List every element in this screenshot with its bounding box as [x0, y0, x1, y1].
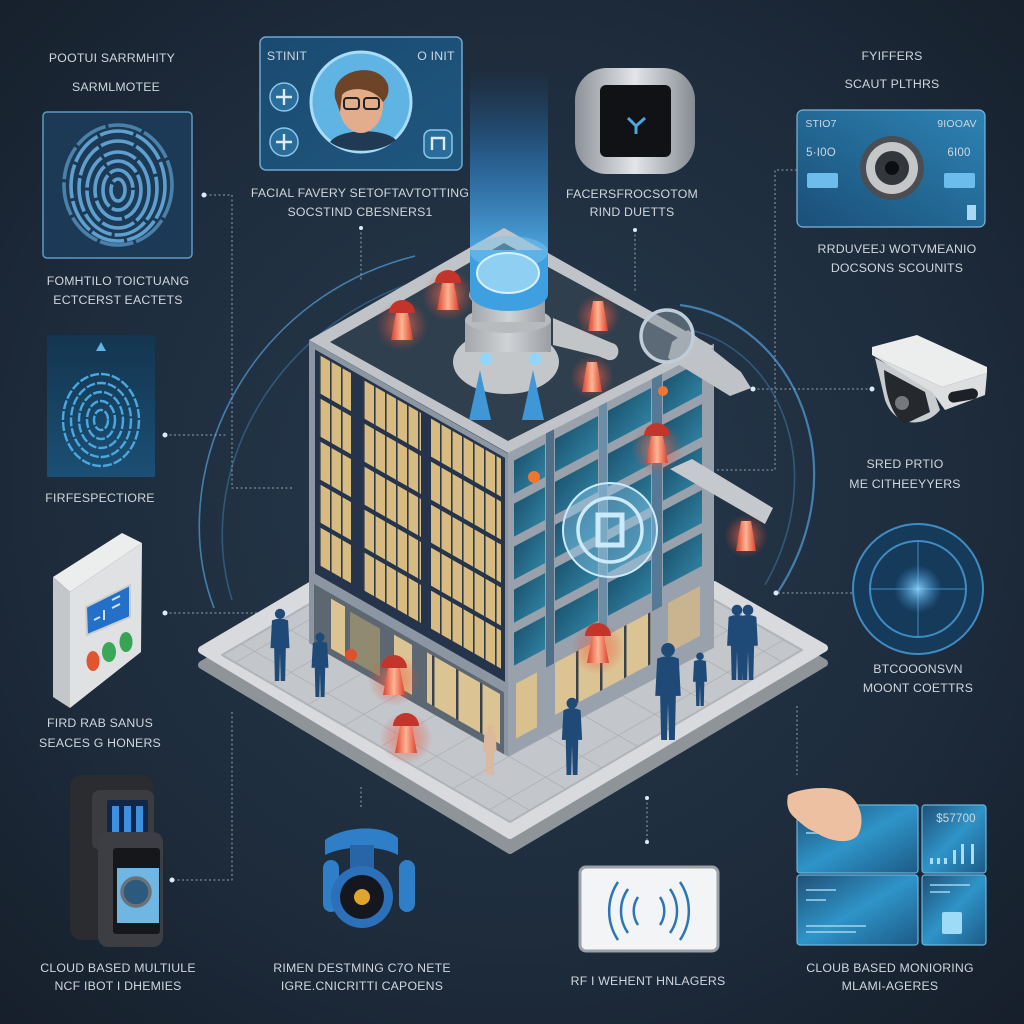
icon: security camera [872, 335, 987, 424]
left facade [309, 340, 508, 757]
caption: remote: IGRE.CNICRITTI CAPOENS [281, 979, 443, 993]
top left heading: POOTUI SARRMHITY [49, 51, 175, 65]
building [309, 228, 714, 757]
arm devices [553, 310, 773, 524]
top left heading: SARMLMOTEE [72, 80, 160, 94]
icon: face [311, 52, 411, 152]
connector lines [162, 170, 874, 882]
icon: glowing fingerprint [63, 374, 139, 466]
caption: cloud monitoring: CLOUB BASED MONIORING [806, 961, 974, 975]
panel: camera dashboard: 9IOOAV [937, 118, 977, 130]
top right heading: FYIFFERS [861, 49, 923, 63]
icon: lens [860, 136, 924, 200]
beam [470, 72, 548, 290]
caption: speed: ME CITHEEYYERS [849, 477, 961, 491]
top right heading: SCAUT PLTHRS [845, 77, 939, 91]
caption: wifi: RF I WEHENT HNLAGERS [571, 974, 725, 988]
caption: cloud based multiple [40, 961, 196, 993]
holographic lock [563, 483, 657, 577]
caption: remote [273, 961, 451, 993]
caption: cloud monitoring [806, 961, 974, 993]
caption: fire inspection: FIRFESPECTIORE [45, 491, 155, 505]
panel: facial recognition: O INIT [417, 49, 455, 63]
caption: cloud based multiple: NCF IBOT I DHEMIES [54, 979, 182, 993]
icon: blue valve camera [323, 828, 415, 928]
panel: camera dashboard: STIO7 [805, 118, 837, 130]
icon: wifi reader [580, 867, 718, 951]
icon: buttons [270, 83, 452, 158]
icon: radar [853, 524, 983, 654]
roof turret [453, 236, 559, 420]
caption: fire alarm: FIRD RAB SANUS [47, 716, 153, 730]
caption: facial: FACIAL FAVERY SETOFTAVTOTTING [251, 186, 469, 200]
orbit arcs [199, 256, 814, 608]
caption: device: RIND DUETTS [590, 205, 674, 219]
caption: facial [251, 186, 469, 219]
caption: cloud based multiple: CLOUD BASED MULTIULE [40, 961, 196, 975]
top right heading [845, 49, 939, 91]
caption: fingerprint [47, 274, 189, 307]
caption: fire alarm: SEACES G HONERS [39, 736, 161, 750]
top left heading [49, 51, 175, 94]
red alarm beacons [345, 269, 768, 764]
caption: camera: DOCSONS SCOUNITS [831, 261, 963, 275]
caption: camera: RRDUVEEJ WOTVMEANIO [818, 242, 976, 256]
icon: hand [787, 788, 862, 841]
icon: smart lock device [575, 68, 695, 174]
right facade [508, 344, 714, 757]
panel: facial recognition: STINIT [267, 49, 307, 63]
panel: camera dashboard: 6I00 [947, 147, 971, 159]
caption: radar [863, 662, 973, 695]
panel: fingerprint [43, 112, 192, 258]
caption: facial: SOCSTIND CBESNERS1 [287, 205, 433, 219]
panel: cloud dashboard [787, 788, 986, 945]
panel: camera dashboard: 5·I0O [806, 147, 836, 159]
caption: fingerprint: FOMHTILO TOICTUANG [47, 274, 189, 288]
caption: speed: SRED PRTIO [867, 457, 943, 471]
caption: device: FACERSFROCSOTOM [566, 187, 698, 201]
icon: fingerprint [64, 125, 172, 245]
platform [202, 585, 824, 850]
panel: facial recognition [260, 37, 462, 170]
panel: camera dashboard [797, 110, 985, 227]
caption: radar: BTCOOONSVN [873, 662, 963, 676]
roof [309, 228, 714, 453]
people [271, 605, 758, 775]
icon: biometric reader [70, 775, 163, 947]
icon: alarm keypad [53, 533, 142, 708]
caption: fire alarm [39, 716, 161, 750]
caption: camera [818, 242, 976, 275]
caption: speed [849, 457, 961, 491]
caption: radar: MOONT COETTRS [863, 681, 973, 695]
panel: cloud dashboard: $57700 [936, 813, 976, 825]
caption: fingerprint: ECTCERST EACTETS [53, 293, 183, 307]
panel: fingerprint 2 [47, 335, 155, 477]
caption: device [566, 187, 698, 219]
caption: cloud monitoring: MLAMI-AGERES [842, 979, 938, 993]
caption: remote: RIMEN DESTMING C7O NETE [273, 961, 451, 975]
